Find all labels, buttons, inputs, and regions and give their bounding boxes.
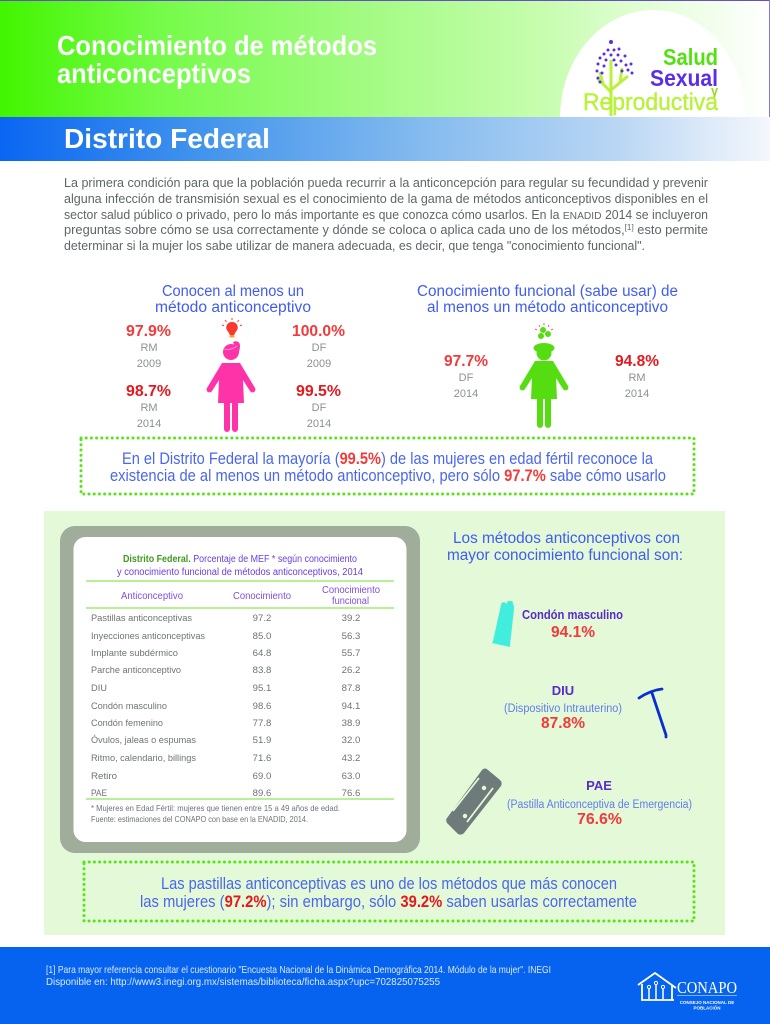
- table rows: 94.1: [342, 701, 360, 712]
- table rows: 43.2: [342, 753, 360, 764]
- stat: RM 2014: RM: [140, 402, 158, 414]
- table rows: Parche anticonceptivo: [91, 665, 181, 676]
- logo: CONAPO: CONSEJO NACIONAL DE: [680, 1000, 734, 1005]
- stat: DF 2014 funcional: 2014: [454, 388, 478, 400]
- footnote text: [46, 964, 551, 988]
- intro paragraph: preguntas sobre cómo se usa correctamente y dónde se coloca o aplica cada uno de los métodos,: [64, 223, 614, 237]
- icon: gears: [535, 323, 553, 339]
- table rows: Retiro: [91, 771, 117, 782]
- table rows: 89.6: [253, 788, 271, 799]
- callout: mayoría: existencia de al menos un método anticonceptivo, pero sólo 97.7% sabe cómo usarlo: [110, 467, 666, 485]
- icon: condom: [492, 601, 514, 647]
- intro paragraph: esto permite: [634, 223, 708, 237]
- table header: Conocimiento: [233, 591, 291, 602]
- icon: green woman: [520, 343, 568, 428]
- table rows: 85.0: [253, 631, 271, 642]
- table rows: 38.9: [342, 718, 360, 729]
- table rows: Ritmo, calendario, billings: [91, 753, 196, 764]
- heading: conocimiento funcional: Conocimiento funcional (sabe usar) de: [417, 283, 678, 300]
- intro paragraph: determinar si la mujer los sabe utilizar de manera adecuada, es decir, que tenga "conocimiento funcional".: [64, 239, 645, 253]
- stat: DF 2009: [292, 323, 345, 370]
- table footnote: Fuente: estimaciones del CONAPO con base en la ENADID, 2014.: [91, 814, 308, 824]
- stat: DF 2014: 2014: [307, 418, 331, 430]
- table header: Anticonceptivo: [121, 591, 183, 602]
- logo: Salud Sexual y Reproductiva: Reproductiva: [583, 89, 719, 116]
- title: [57, 30, 377, 89]
- callout: mayoría: [81, 438, 694, 494]
- stat: DF 2009: 100.0%: [292, 323, 345, 340]
- intro paragraph: [1]: [625, 223, 634, 232]
- stat: RM 2014 funcional: 2014: [625, 388, 649, 400]
- table rows: 83.8: [253, 665, 271, 676]
- panel: conocen al menos un método: [126, 283, 345, 432]
- table rows: 32.0: [342, 735, 360, 746]
- method: condón masculino: Condón masculino: [522, 607, 623, 622]
- method: condón masculino: 94.1%: [551, 624, 595, 641]
- table header: Conocimiento: [322, 585, 380, 596]
- stat: RM 2009: 97.9%: [126, 323, 171, 340]
- heading: conocimiento funcional: al menos un método anticonceptivo: [427, 299, 668, 316]
- panel: conocimiento funcional: [417, 283, 678, 428]
- table rows: Implante subdérmico: [91, 648, 178, 659]
- table rows: Condón femenino: [91, 718, 163, 729]
- table rows: [91, 613, 360, 799]
- heading: métodos con mayor conocimiento: [447, 530, 683, 564]
- heading: métodos con mayor conocimiento: Los métodos anticonceptivos con: [453, 530, 680, 547]
- intro paragraph: [64, 176, 708, 253]
- stat: RM 2014 funcional: [615, 353, 659, 400]
- stat: DF 2014: [296, 383, 341, 430]
- callout: mayoría: En el Distrito Federal la mayoría (99.5%) de las mujeres en edad fértil reconoce la: [122, 450, 654, 468]
- table rows: 56.3: [342, 631, 360, 642]
- intro paragraph: alguna infección de transmisión sexual es el conocimiento de la gama de métodos anticonceptivos disponibles en el: [64, 192, 708, 206]
- logo: Salud Sexual y Reproductiva: [560, 10, 746, 117]
- table footnote: * Mujeres en Edad Fértil: mujeres que tienen entre 15 a 49 años de edad.: [91, 803, 340, 813]
- footer band: [0, 947, 770, 1024]
- stat: DF 2014: DF: [312, 402, 327, 414]
- method: PAE: 76.6%: [577, 811, 622, 828]
- stat: RM 2009: [126, 323, 171, 370]
- table title: Distrito Federal. Porcentaje de MEF * según conocimiento: [123, 554, 357, 565]
- method: PAE: PAE: [586, 778, 612, 793]
- table rows: 64.8: [253, 648, 271, 659]
- icon: light bulb: [222, 318, 242, 338]
- heading: conocen: [155, 283, 311, 316]
- title: anticonceptivos: [57, 58, 251, 89]
- logo: Salud Sexual y Reproductiva: y: [711, 83, 719, 100]
- stat: RM 2009: 2009: [137, 358, 161, 370]
- heading: conocimiento funcional: [417, 283, 678, 316]
- stat: RM 2014 funcional: 94.8%: [615, 353, 659, 370]
- callout: pastillas: Las pastillas anticonceptivas es uno de los métodos que más conocen: [161, 875, 617, 893]
- table rows: Pastillas anticonceptivas: [91, 613, 192, 624]
- method: PAE: (Pastilla Anticonceptiva de Emergencia): [507, 799, 692, 811]
- table rows: 87.8: [342, 683, 360, 694]
- method: PAE: [507, 778, 692, 828]
- heading: métodos con mayor conocimiento: mayor conocimiento funcional son:: [447, 547, 683, 564]
- logo: CONAPO: [638, 973, 737, 1010]
- icon: IUD: [639, 689, 666, 737]
- header banner: [0, 0, 770, 117]
- icon: pink woman: [207, 341, 255, 432]
- panel: light green background: [44, 511, 725, 935]
- table rows: 39.2: [342, 613, 360, 624]
- intro paragraph: La primera condición para que la población pueda recurrir a la anticoncepción para regular su fecundidad y prevenir: [64, 176, 708, 190]
- heading: conocen: Conocen al menos un: [162, 283, 304, 300]
- table rows: 26.2: [342, 665, 360, 676]
- icon: emergency pill pack: [446, 768, 502, 835]
- table title: [117, 554, 363, 578]
- table rows: PAE: [91, 788, 107, 799]
- method: DIU: [504, 683, 622, 732]
- table footnote: [91, 803, 340, 824]
- stat: RM 2014 funcional: RM: [628, 372, 646, 384]
- stat: RM 2014: 98.7%: [126, 383, 171, 400]
- table rows: 77.8: [253, 718, 271, 729]
- table rows: 71.6: [253, 753, 271, 764]
- table rows: 98.6: [253, 701, 271, 712]
- method: DIU: 87.8%: [541, 715, 585, 732]
- table rows: Óvulos, jaleas o espumas: [91, 735, 196, 746]
- stat: DF 2014 funcional: 97.7%: [444, 353, 488, 370]
- method: condón masculino: [522, 607, 623, 641]
- callout: pastillas: las mujeres (97.2%); sin embargo, sólo 39.2% saben usarlas correctamente: [140, 893, 637, 911]
- panel: table: [60, 526, 420, 853]
- logo: CONAPO: POBLACIÓN: [694, 1004, 720, 1010]
- table rows: DIU: [91, 683, 107, 694]
- heading: conocen: método anticonceptivo: [155, 299, 311, 316]
- region banner: Distrito Federal: Distrito Federal: [64, 123, 270, 154]
- method: DIU: (Dispositivo Intrauterino): [504, 703, 622, 715]
- method: DIU: DIU: [552, 683, 574, 698]
- footnote text: Disponible en: http://www3.inegi.org.mx/sistemas/biblioteca/ficha.aspx?upc=702825075255: [46, 976, 440, 988]
- table rows: 51.9: [253, 735, 271, 746]
- logo: CONAPO: CONAPO: [677, 978, 737, 997]
- stat: DF 2014 funcional: [444, 353, 488, 400]
- footnote text: [1] Para mayor referencia consultar el cuestionario "Encuesta Nacional de la Dinámica Demográfica 2014. Módulo de la mujer". INEGI: [46, 964, 551, 976]
- stat: DF 2009: 2009: [307, 358, 331, 370]
- stat: DF 2009: DF: [312, 342, 327, 354]
- stat: DF 2014 funcional: DF: [459, 372, 474, 384]
- table rows: 69.0: [253, 771, 271, 782]
- table rows: Inyecciones anticonceptivas: [91, 631, 205, 642]
- table header: [121, 585, 380, 607]
- stat: DF 2014: 99.5%: [296, 383, 341, 400]
- title: Conocimiento de métodos: [57, 30, 377, 61]
- logo: Salud Sexual y Reproductiva: Salud: [663, 44, 718, 70]
- table rows: 55.7: [342, 648, 360, 659]
- intro paragraph: sector salud público o privado, pero lo más importante es que conozca cómo usarlos. En la ENADID 2014 se incluyeron: [64, 208, 708, 222]
- table rows: 97.2: [253, 613, 271, 624]
- callout: pastillas: [84, 862, 694, 921]
- stat: RM 2014: 2014: [137, 418, 161, 430]
- stat: RM 2014: [126, 383, 171, 430]
- stat: RM 2009: RM: [140, 342, 158, 354]
- region banner: Distrito Federal: [0, 117, 770, 161]
- table title: y conocimiento funcional de métodos anticonceptivos, 2014: [117, 567, 363, 578]
- table header: funcional: [332, 596, 369, 607]
- table rows: 63.0: [342, 771, 360, 782]
- table rows: 95.1: [253, 683, 271, 694]
- table rows: 76.6: [342, 788, 360, 799]
- table rows: Condón masculino: [91, 701, 167, 712]
- logo: Salud Sexual y Reproductiva: Sexual: [650, 65, 718, 91]
